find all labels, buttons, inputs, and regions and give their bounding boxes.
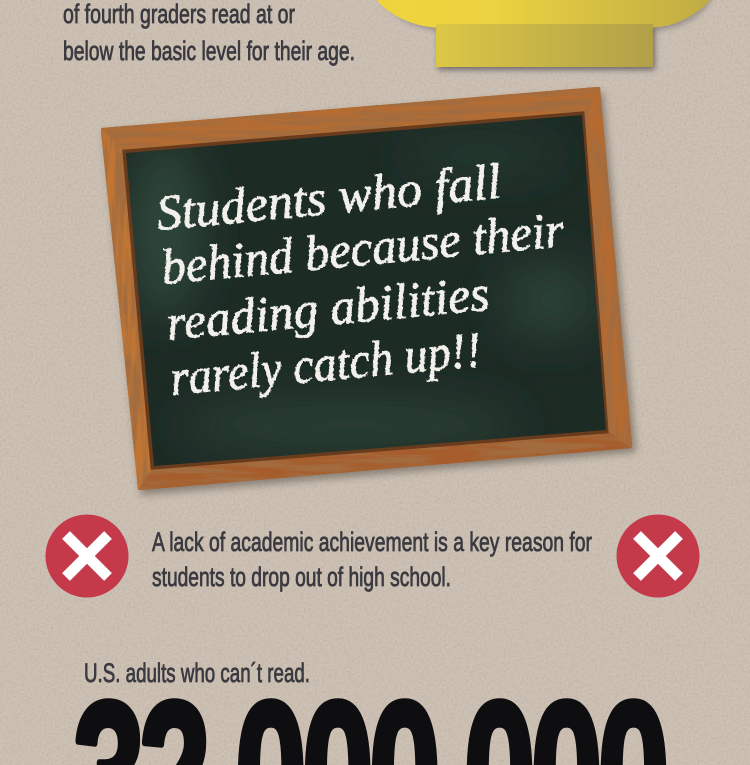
chalkboard	[95, 80, 640, 495]
text block: academic achievement	[152, 527, 592, 592]
wooden frame	[95, 80, 640, 495]
chalk message: Students who fall	[154, 153, 503, 241]
frame shadow	[104, 92, 636, 495]
icon: red cross left	[46, 514, 128, 598]
text block: academic achievement: A lack of academic achievement is a key reason for	[152, 527, 592, 557]
green board surface	[126, 115, 606, 466]
label: adults who can't read: U.S. adults who can´t read.	[84, 658, 310, 688]
text block: fourth graders statistic: below the basic level for their age.	[63, 36, 355, 66]
chalk message: behind because their	[159, 201, 567, 295]
chalk message	[154, 153, 567, 406]
icon: red cross right	[616, 514, 700, 598]
chalk message: rarely catch up!!	[168, 321, 484, 406]
chalk message: reading abilities	[164, 265, 492, 351]
text block: fourth graders statistic	[63, 0, 355, 66]
text block: academic achievement: students to drop out of high school.	[152, 562, 451, 592]
icon: yellow book/pedestal shape	[375, 0, 715, 70]
